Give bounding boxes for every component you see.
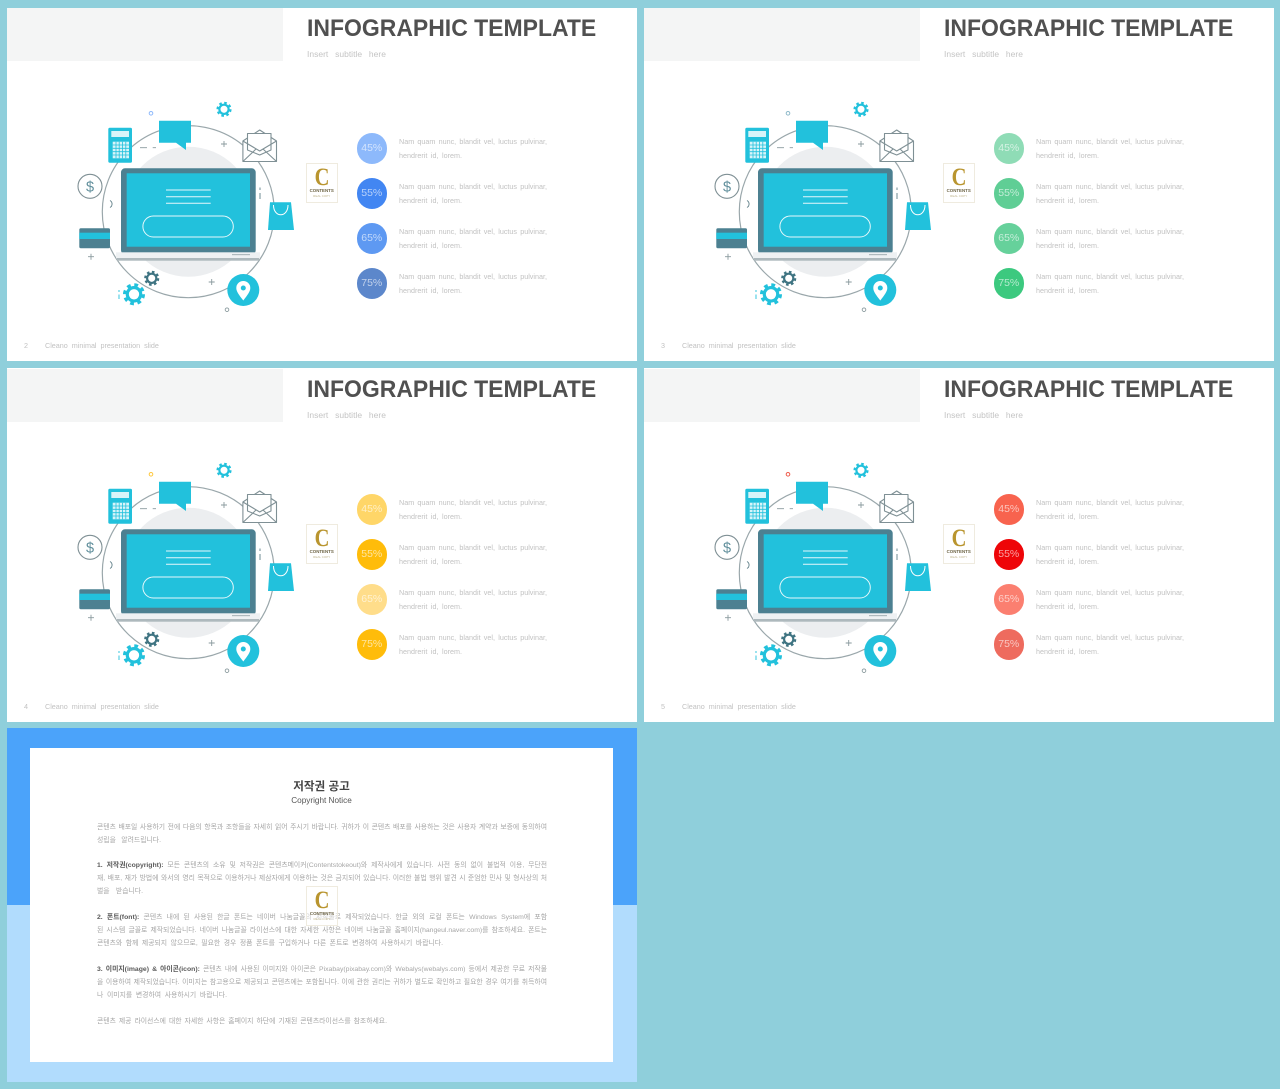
- icon: envelope: [880, 130, 914, 162]
- logo: CONTENTS: [310, 188, 334, 193]
- item 55%: [357, 178, 547, 209]
- accent circle: [786, 112, 790, 115]
- footer: Cleano minimal presentation slide: [682, 341, 796, 350]
- slide 1: blue: [7, 8, 636, 361]
- item 65%: 65%: [361, 232, 382, 244]
- icon: location pin: [227, 274, 259, 306]
- item 75%: [994, 629, 1184, 660]
- item 75%: 75%: [361, 277, 382, 289]
- icon: shopping bag: [905, 202, 931, 230]
- header band: [644, 369, 920, 422]
- small plus and dash marks: [725, 141, 897, 312]
- small plus and dash marks: [88, 502, 260, 672]
- illustration: laptop with icons: [77, 462, 294, 673]
- disc: [123, 508, 253, 638]
- icon: credit card: [716, 228, 747, 248]
- icon: dollar coin: [715, 174, 739, 198]
- icon: gear dark: [782, 272, 795, 285]
- icon: chat bubble: [796, 121, 828, 150]
- icon: shopping bag: [905, 563, 931, 591]
- icon: calculator: [745, 489, 769, 524]
- icon: laptop: [116, 168, 260, 261]
- subheading: Copyright Notice: [291, 796, 352, 805]
- icon: location pin: [864, 274, 896, 306]
- logo: C: [951, 525, 966, 552]
- item 55%: hendrerit id, lorem.: [1036, 196, 1099, 205]
- header band: [7, 8, 283, 61]
- title: INFOGRAPHIC TEMPLATE: [944, 376, 1233, 402]
- blue upper background: [7, 728, 637, 905]
- footer: Cleano minimal presentation slide: [45, 341, 159, 350]
- logo: REAL COPY: [950, 555, 967, 559]
- item 65%: hendrerit id, lorem.: [1036, 241, 1099, 250]
- icon: laptop: [753, 168, 897, 261]
- icon: dollar coin: [78, 174, 102, 198]
- icon: gear large: [762, 285, 780, 304]
- disc: [760, 147, 890, 277]
- item 45%: 45%: [998, 142, 1019, 154]
- item 75%: hendrerit id, lorem.: [1036, 286, 1099, 295]
- item 55%: Nam quam nunc, blandit vel, luctus pulvinar,: [1036, 182, 1184, 191]
- item 55%: 55%: [361, 187, 382, 199]
- icon: location pin: [227, 635, 259, 667]
- item 45%: 45%: [361, 503, 382, 515]
- slide 3: yellow: [7, 369, 636, 722]
- logo: REAL COPY: [313, 555, 330, 559]
- item 65%: [994, 584, 1184, 615]
- item 65%: [357, 584, 547, 615]
- item 75%: hendrerit id, lorem.: [399, 647, 462, 656]
- item 45%: [994, 133, 1184, 164]
- subtitle: Insert subtitle here: [944, 49, 1023, 59]
- item 55%: [357, 539, 547, 570]
- icon: calculator: [745, 128, 769, 163]
- item 65%: 65%: [998, 593, 1019, 605]
- item 65%: [357, 223, 547, 254]
- icon: dollar coin: [78, 535, 102, 559]
- item 45%: hendrerit id, lorem.: [1036, 151, 1099, 160]
- item 55%: hendrerit id, lorem.: [399, 557, 462, 566]
- icon: gear dark: [782, 633, 795, 646]
- icon: dollar coin: [715, 535, 739, 559]
- ring: [739, 487, 911, 659]
- footer: Cleano minimal presentation slide: [45, 702, 159, 711]
- item 65%: 65%: [361, 593, 382, 605]
- item 65%: Nam quam nunc, blandit vel, luctus pulvinar,: [1036, 227, 1184, 236]
- logo: CONTENTS: [310, 549, 334, 554]
- item 75%: [357, 268, 547, 299]
- panel: copyright notice: 재, 배포, 재가 방법에 와서의 영리 목적으로 이용하거나 제삼자에게 이용하는 것은 금지되어 있습니다. 이러한 불법 행위 발견 시 준엄한 민사 및 형사상의 처: [97, 874, 547, 882]
- item 55%: [994, 539, 1184, 570]
- item 75%: Nam quam nunc, blandit vel, luctus pulvinar,: [399, 633, 547, 642]
- icon: credit card: [716, 589, 747, 609]
- panel: copyright notice: 을 이용하여 제작되었습니다. 이미지는 참고용으로 제공되고 콘텐츠에는 포함됩니다. 이에 관한 권리는 귀하가 별도로 확인하고 필요한 경우 여기를 취득하여: [97, 978, 547, 986]
- logo: CONTENTS: [947, 549, 971, 554]
- icon: laptop: [753, 529, 897, 622]
- disc: [760, 508, 890, 638]
- icon: location pin: [864, 635, 896, 667]
- intro text: 콘텐츠 배포일 사용하기 전에 다음의 항목과 조항들을 자세히 읽어 주시기 바랍니다. 귀하가 이 콘텐츠 배포를 사용하는 것은 사용자 계약과 보증에 동의하여: [97, 824, 547, 830]
- item 75%: Nam quam nunc, blandit vel, luctus pulvinar,: [399, 272, 547, 281]
- title: INFOGRAPHIC TEMPLATE: [307, 376, 596, 402]
- footer: Cleano minimal presentation slide: [682, 702, 796, 711]
- icon: credit card: [79, 228, 110, 248]
- small plus and dash marks: [725, 502, 897, 672]
- item 45%: [994, 494, 1184, 525]
- icon: shopping bag: [268, 202, 294, 230]
- item 55%: Nam quam nunc, blandit vel, luctus pulvinar,: [399, 543, 547, 552]
- icon: gear dark: [145, 633, 158, 646]
- item 75%: Nam quam nunc, blandit vel, luctus pulvinar,: [1036, 272, 1184, 281]
- item 75%: hendrerit id, lorem.: [399, 286, 462, 295]
- item 55%: hendrerit id, lorem.: [1036, 557, 1099, 566]
- icon: envelope: [243, 491, 276, 522]
- icon: gear large: [125, 646, 143, 665]
- icon: credit card: [79, 589, 110, 609]
- item 75%: hendrerit id, lorem.: [1036, 647, 1099, 656]
- logo: [306, 886, 338, 926]
- logo: [943, 163, 975, 203]
- logo: [306, 163, 338, 203]
- item 55%: 55%: [998, 187, 1019, 199]
- item 45%: Nam quam nunc, blandit vel, luctus pulvinar,: [1036, 498, 1184, 507]
- slide 4: red: [644, 369, 1274, 722]
- logo: [306, 524, 338, 564]
- item 45%: hendrerit id, lorem.: [399, 512, 462, 521]
- item 55%: 55%: [998, 548, 1019, 560]
- item 75%: Nam quam nunc, blandit vel, luctus pulvinar,: [1036, 633, 1184, 642]
- item 75%: 75%: [998, 277, 1019, 289]
- item 45%: 45%: [998, 503, 1019, 515]
- logo: C: [314, 164, 329, 191]
- illustration: laptop with icons: [77, 102, 294, 312]
- panel: copyright notice: 된 시스템 글꼴로 제작되었습니다. 네이버 나눔글꼴 라이선스에 대한 자세한 사항은 네이버 나눔글꼴 홈페이지(hangeul.naver.com)를 참조하세요. 폰트는: [97, 926, 547, 934]
- item 45%: [357, 133, 547, 164]
- title: INFOGRAPHIC TEMPLATE: [307, 14, 596, 42]
- item 75%: [357, 629, 547, 660]
- item 65%: Nam quam nunc, blandit vel, luctus pulvinar,: [399, 227, 547, 236]
- icon: gear large: [762, 646, 780, 665]
- small plus and dash marks: [88, 141, 260, 312]
- item 65%: hendrerit id, lorem.: [399, 241, 462, 250]
- panel: copyright notice: 콘텐츠와 함께 제공되지 않으므로, 필요한 경우 정품 폰트를 구입하거나 다른 폰트로 변경하여 사용하시기 바랍니다.: [97, 940, 443, 946]
- item 55%: Nam quam nunc, blandit vel, luctus pulvinar,: [399, 182, 547, 191]
- item 75%: [994, 268, 1184, 299]
- closing line: 콘텐츠 제공 라이선스에 대한 자세한 사항은 홈페이지 하단에 기재된 콘텐츠라이선스를 참조하세요.: [97, 1018, 387, 1024]
- illustration: laptop with icons: [714, 102, 931, 312]
- panel: copyright notice: 벌을 받습니다.: [97, 888, 143, 894]
- slide 2: green: [644, 8, 1274, 361]
- ring: [102, 126, 274, 298]
- white card: [30, 748, 613, 1062]
- heading: 저작권 공고: [293, 780, 350, 793]
- illustration: laptop with icons: [714, 462, 931, 673]
- title: INFOGRAPHIC TEMPLATE: [944, 14, 1233, 42]
- item 65%: [994, 223, 1184, 254]
- logo: CONTENTS: [947, 188, 971, 193]
- accent circle: [149, 112, 153, 115]
- logo: C: [314, 525, 329, 552]
- icon: laptop: [116, 529, 260, 622]
- panel: copyright notice: [7, 728, 637, 1082]
- logo: REAL COPY: [313, 917, 331, 921]
- icon: chat bubble: [159, 121, 191, 150]
- clause 1: 1. 저작권(copyright): 모든 콘텐츠의 소유 및 저작권은 콘텐츠메이커(Contentstokeout)와 제작사에게 있습니다. 사전 동의 없이 불법적 이용, 무단전: [97, 862, 547, 868]
- icon: gear top: [855, 464, 867, 477]
- icon: envelope: [880, 491, 914, 522]
- clause 2: 2. 폰트(font): 콘텐츠 내에 된 사용된 한글 폰트는 네이버 나눔글꼴의 저작물로 제작되었습니다. 한글 외의 로컬 폰트는 Windows System에 포함: [97, 914, 547, 920]
- header band: [7, 369, 283, 422]
- logo: REAL COPY: [313, 194, 330, 198]
- item 75%: 75%: [361, 638, 382, 650]
- header band: [644, 8, 920, 61]
- item 75%: 75%: [998, 638, 1019, 650]
- item 65%: 65%: [998, 232, 1019, 244]
- footer: 2: [24, 341, 28, 350]
- item 65%: Nam quam nunc, blandit vel, luctus pulvinar,: [1036, 588, 1184, 597]
- icon: gear large: [125, 285, 143, 304]
- icon: calculator: [108, 489, 132, 524]
- disc: [123, 147, 253, 277]
- item 45%: Nam quam nunc, blandit vel, luctus pulvinar,: [1036, 137, 1184, 146]
- subtitle: Insert subtitle here: [307, 410, 386, 420]
- footer: 3: [661, 341, 665, 350]
- footer: 5: [661, 702, 665, 711]
- item 45%: Nam quam nunc, blandit vel, luctus pulvinar,: [399, 137, 547, 146]
- subtitle: Insert subtitle here: [307, 49, 386, 59]
- item 45%: Nam quam nunc, blandit vel, luctus pulvinar,: [399, 498, 547, 507]
- clause 3: 3. 이미지(image) & 아이콘(icon): 콘텐츠 내에 사용된 이미지와 아이콘은 Pixabay(pixabay.com)와 Webalys(webalys.com) 등에서 제공한 무료 저작물: [97, 966, 547, 972]
- icon: calculator: [108, 128, 132, 163]
- logo: CONTENTS: [310, 911, 334, 916]
- icon: gear top: [855, 103, 867, 116]
- ring: [739, 126, 911, 298]
- logo: C: [315, 887, 329, 914]
- icon: chat bubble: [796, 482, 828, 511]
- icon: envelope: [243, 130, 276, 162]
- logo: C: [951, 164, 966, 191]
- accent circle: [149, 472, 153, 476]
- item 55%: hendrerit id, lorem.: [399, 196, 462, 205]
- logo: [943, 524, 975, 564]
- item 45%: hendrerit id, lorem.: [1036, 512, 1099, 521]
- item 55%: Nam quam nunc, blandit vel, luctus pulvinar,: [1036, 543, 1184, 552]
- item 45%: 45%: [361, 142, 382, 154]
- item 65%: Nam quam nunc, blandit vel, luctus pulvinar,: [399, 588, 547, 597]
- subtitle: Insert subtitle here: [944, 410, 1023, 420]
- icon: shopping bag: [268, 563, 294, 591]
- ring: [102, 487, 274, 659]
- icon: gear top: [218, 103, 230, 116]
- icon: gear top: [218, 464, 230, 477]
- panel: copyright notice: 나 이미지를 변경하여 사용하시기 바랍니다.: [97, 992, 227, 998]
- item 55%: 55%: [361, 548, 382, 560]
- item 45%: hendrerit id, lorem.: [399, 151, 462, 160]
- accent circle: [786, 472, 790, 476]
- item 65%: hendrerit id, lorem.: [1036, 602, 1099, 611]
- icon: gear dark: [145, 272, 158, 285]
- item 45%: [357, 494, 547, 525]
- footer: 4: [24, 702, 28, 711]
- item 55%: [994, 178, 1184, 209]
- item 65%: hendrerit id, lorem.: [399, 602, 462, 611]
- logo: REAL COPY: [950, 194, 967, 198]
- icon: chat bubble: [159, 482, 191, 511]
- panel: copyright notice: 성립을 알려드립니다.: [97, 836, 161, 844]
